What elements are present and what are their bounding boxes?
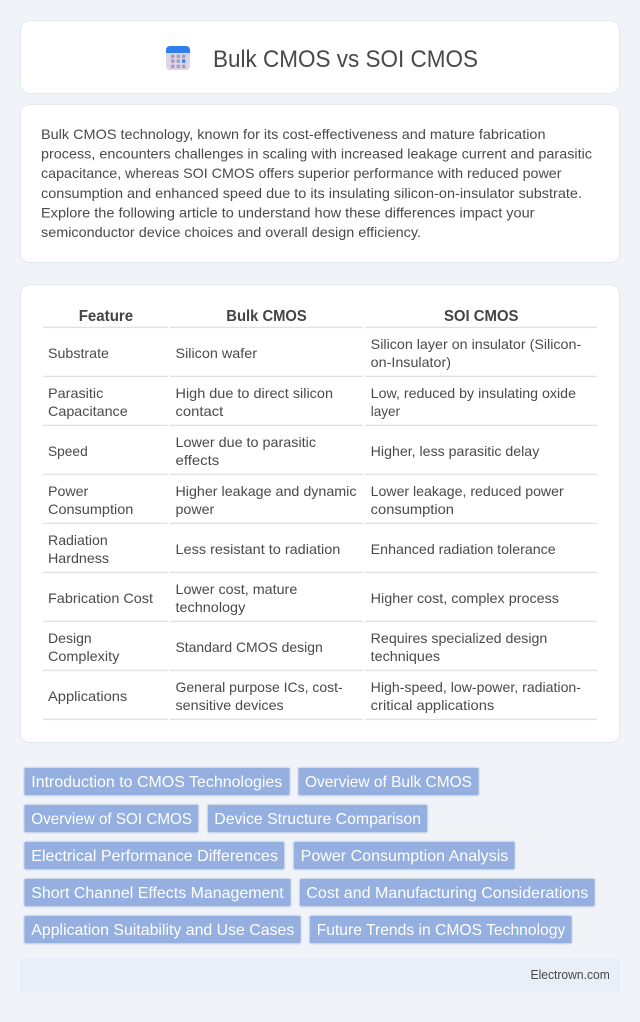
table header row: Bulk CMOS bbox=[226, 308, 307, 325]
tag: Short Channel Effects Management bbox=[24, 878, 291, 907]
table row: Power Consumption bbox=[43, 483, 597, 524]
icon: calendar bbox=[166, 46, 190, 70]
panel: title header bbox=[20, 20, 620, 94]
table row: Speed: Speed bbox=[48, 443, 88, 459]
table row: Applications: critical applications bbox=[371, 697, 494, 713]
table row: Substrate bbox=[43, 336, 597, 377]
table row: Speed: effects bbox=[176, 452, 219, 468]
table row: Applications bbox=[43, 679, 597, 720]
table row: Power Consumption: power bbox=[176, 501, 215, 517]
table row: Design Complexity: techniques bbox=[371, 648, 440, 664]
tag: Cost and Manufacturing Considerations: Cost and Manufacturing Considerations bbox=[306, 885, 588, 902]
table row: Design Complexity: Design bbox=[48, 630, 92, 646]
tag: Cost and Manufacturing Considerations bbox=[299, 878, 595, 907]
tag: Power Consumption Analysis bbox=[293, 841, 515, 870]
table row: Design Complexity: Requires specialized design bbox=[371, 630, 547, 646]
table row: Substrate: on-Insulator) bbox=[371, 354, 451, 370]
title: Bulk CMOS vs SOI CMOS bbox=[213, 46, 478, 73]
table row: Design Complexity bbox=[43, 630, 597, 671]
tag: Application Suitability and Use Cases bbox=[24, 915, 301, 944]
panel: introduction bbox=[20, 104, 620, 262]
table row: Radiation Hardness: Enhanced radiation tolerance bbox=[371, 541, 556, 557]
table row: Substrate: Silicon layer on insulator (Silicon- bbox=[371, 336, 582, 352]
table row: Speed bbox=[43, 434, 597, 475]
table row: Parasitic Capacitance bbox=[43, 385, 597, 426]
text block: introduction paragraph: Bulk CMOS technology, known for its cost-effectiveness and mature fabrication bbox=[41, 126, 546, 142]
table row: Radiation Hardness bbox=[43, 532, 597, 573]
panel: comparison table bbox=[20, 284, 620, 742]
text block: introduction paragraph: semiconductor device choices and overall design efficiency. bbox=[41, 224, 421, 240]
table row: Fabrication Cost: Lower cost, mature bbox=[176, 581, 298, 597]
table row: Parasitic Capacitance: Parasitic bbox=[48, 385, 103, 401]
table row: Power Consumption: Higher leakage and dynamic bbox=[176, 483, 356, 499]
table header row: Feature bbox=[79, 308, 133, 325]
tag: Electrical Performance Differences: Electrical Performance Differences bbox=[31, 848, 278, 865]
table row: Design Complexity: Standard CMOS design bbox=[176, 639, 323, 655]
table row: Substrate: Silicon wafer bbox=[176, 345, 257, 361]
footer bbox=[20, 958, 620, 992]
tag: Electrical Performance Differences bbox=[24, 841, 285, 870]
text block: introduction paragraph bbox=[41, 126, 592, 240]
table row: Power Consumption: Lower leakage, reduced power bbox=[371, 483, 564, 499]
tag: Short Channel Effects Management: Short Channel Effects Management bbox=[31, 885, 284, 902]
table row: Substrate: Substrate bbox=[48, 345, 109, 361]
footer source credit: Electrown.com bbox=[530, 967, 610, 982]
tag: Future Trends in CMOS Technology: Future Trends in CMOS Technology bbox=[317, 922, 565, 939]
text block: introduction paragraph: consumption and enhanced speed due to its insulating silicon-on-insulator substrate. bbox=[41, 185, 582, 201]
table header row bbox=[43, 308, 597, 328]
tag: Introduction to CMOS Technologies bbox=[24, 767, 290, 796]
table row: Parasitic Capacitance: layer bbox=[371, 403, 400, 419]
table row: Applications: General purpose ICs, cost- bbox=[176, 679, 343, 695]
table header row: SOI CMOS bbox=[444, 308, 519, 325]
table row: Power Consumption: consumption bbox=[371, 501, 454, 517]
panel: topic tags bbox=[24, 767, 595, 944]
table row: Speed: Higher, less parasitic delay bbox=[371, 443, 539, 459]
table row: Fabrication Cost: Fabrication Cost bbox=[48, 590, 153, 606]
table row: Design Complexity: Complexity bbox=[48, 648, 119, 664]
table row: Fabrication Cost: Higher cost, complex process bbox=[371, 590, 559, 606]
tag: Overview of Bulk CMOS: Overview of Bulk CMOS bbox=[305, 774, 472, 791]
table row: Parasitic Capacitance: High due to direct silicon bbox=[176, 385, 333, 401]
tag: Overview of SOI CMOS: Overview of SOI CMOS bbox=[31, 811, 192, 828]
tag: Power Consumption Analysis: Power Consumption Analysis bbox=[301, 848, 508, 865]
table row: Fabrication Cost: technology bbox=[176, 599, 245, 615]
tag: Introduction to CMOS Technologies: Introduction to CMOS Technologies bbox=[31, 774, 282, 791]
table row: Power Consumption: Power bbox=[48, 483, 89, 499]
table row: Applications: High-speed, low-power, radiation- bbox=[371, 679, 581, 695]
tag: Overview of SOI CMOS bbox=[24, 804, 199, 833]
table row: Parasitic Capacitance: Low, reduced by insulating oxide bbox=[371, 385, 576, 401]
text block: introduction paragraph: process, encounters challenges in scaling with increased leakage current and parasitic bbox=[41, 146, 592, 162]
table row: Speed: Lower due to parasitic bbox=[176, 434, 316, 450]
table row: Radiation Hardness: Hardness bbox=[48, 550, 109, 566]
table row: Fabrication Cost bbox=[43, 581, 597, 622]
text block: introduction paragraph: capacitance, whereas SOI CMOS offers superior performance with reduced power bbox=[41, 165, 562, 181]
table row: Power Consumption: Consumption bbox=[48, 501, 133, 517]
table row: Applications: sensitive devices bbox=[176, 697, 284, 713]
tag: Future Trends in CMOS Technology bbox=[309, 915, 572, 944]
table row: Parasitic Capacitance: Capacitance bbox=[48, 403, 128, 419]
tag: Device Structure Comparison bbox=[207, 804, 428, 833]
table row: Radiation Hardness: Radiation bbox=[48, 532, 108, 548]
table row: Applications: Applications bbox=[48, 688, 127, 704]
tag: Device Structure Comparison: Device Structure Comparison bbox=[214, 811, 421, 828]
table row: Parasitic Capacitance: contact bbox=[176, 403, 223, 419]
text block: introduction paragraph: Explore the following article to understand how these differences impact your bbox=[41, 204, 535, 220]
table row: Radiation Hardness: Less resistant to radiation bbox=[176, 541, 340, 557]
tag: Overview of Bulk CMOS bbox=[298, 767, 479, 796]
tag: Application Suitability and Use Cases: Application Suitability and Use Cases bbox=[31, 922, 294, 939]
